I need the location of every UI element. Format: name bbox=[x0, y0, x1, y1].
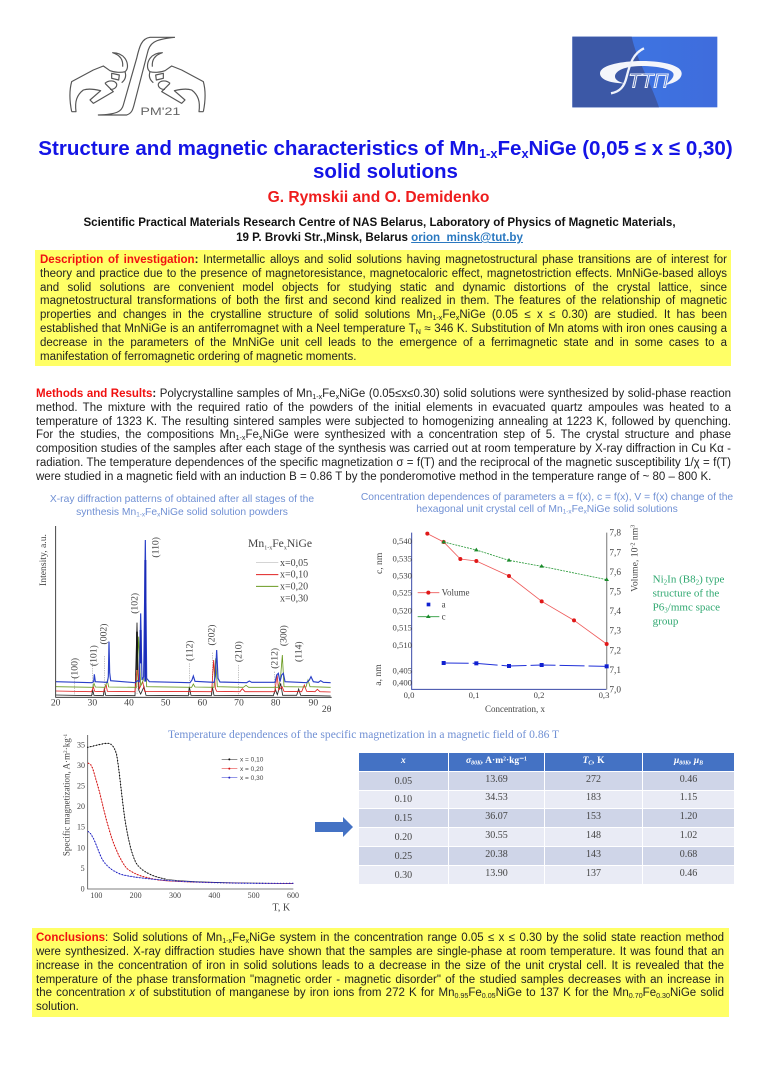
note: crystal structure: 2 bbox=[696, 579, 700, 587]
series: x=0.30 bbox=[56, 540, 331, 683]
chart: lattice parameters vs concentration: 0,405 bbox=[393, 666, 412, 676]
series: x=0.10 bbox=[88, 743, 293, 883]
table: magnetic characteristics: 143 bbox=[586, 849, 601, 860]
table: magnetic characteristics: 13.90 bbox=[485, 868, 508, 879]
chart: X-ray diffraction patterns: (212) bbox=[270, 648, 281, 669]
table: magnetic characteristics: 0.20 bbox=[395, 832, 412, 843]
chart: X-ray diffraction patterns: (002) bbox=[99, 624, 110, 644]
table: magnetic characteristics: 0.05 bbox=[395, 776, 412, 787]
chart: lattice parameters vs concentration: 0,535 bbox=[393, 553, 412, 563]
chart: specific magnetization vs temperature: 300 bbox=[169, 891, 181, 900]
text block: methods and results: For the studies, the compositions Mn1-xFexNiGe were synthesized with a concentration step of 5. The crystal structure and phase bbox=[36, 429, 731, 442]
panel: description of investigation: theory and practice due to the presence of magnetoresistance, magnetocaloric effect, magnetostriction effects. MnNiGe-based alloys bbox=[40, 268, 727, 280]
chart: lattice parameters vs concentration: Volume, 10 bbox=[629, 548, 640, 592]
text block: methods and results: Methods and Results: Polycrystalline samples of Mn1-xFexNiGe (0.05≤x≤0.30) solid solutions were synthesized by solid-phase reaction bbox=[36, 388, 731, 401]
legend: Volume bbox=[442, 588, 470, 598]
table: magnetic characteristics: 13.69 bbox=[485, 774, 508, 785]
table: magnetic characteristics: 36.07 bbox=[485, 811, 508, 822]
chart: X-ray diffraction patterns: (114) bbox=[294, 641, 305, 662]
caption: concentration dependences bbox=[361, 492, 733, 516]
chart: lattice parameters vs concentration: 0,515 bbox=[393, 623, 412, 633]
legend bbox=[222, 757, 264, 782]
logo: PM'21 conference emblem bbox=[69, 36, 206, 118]
chart: specific magnetization vs temperature: 200 bbox=[130, 891, 142, 900]
arrow: chart to table bbox=[315, 817, 353, 837]
chart: lattice parameters vs concentration: 7,7 bbox=[609, 548, 621, 558]
series: x=0.20 bbox=[88, 763, 293, 884]
affiliation bbox=[83, 216, 676, 244]
chart: X-ray diffraction patterns: 70 bbox=[234, 698, 244, 709]
panel: description of investigation: established that MnNiGe is an antiferromagnet with a Neel temperature TN ≈ 346 K. Substitution of Mn atoms with iron ones causing a bbox=[40, 323, 727, 336]
chart: X-ray diffraction patterns: 30 bbox=[88, 698, 97, 709]
legend: x=0,05 bbox=[280, 558, 308, 569]
panel: conclusions: temperature of the phase transformation "magnetic order - magnetic disorder" of the studied samples decreases with an increase in bbox=[36, 974, 724, 986]
table: magnetic characteristics: 20.38 bbox=[485, 849, 508, 860]
chart: X-ray diffraction patterns: (112) bbox=[185, 640, 196, 661]
logo: PM'21 conference emblem: PM'21 bbox=[140, 106, 180, 118]
chart: specific magnetization vs temperature: 400 bbox=[208, 891, 220, 900]
note: crystal structure: In (B8 bbox=[667, 574, 696, 586]
chart: X-ray diffraction patterns: (210) bbox=[234, 641, 245, 662]
legend: x = 0,30 bbox=[240, 775, 264, 782]
caption: X-ray diffraction: X-ray diffraction patterns of obtained after all stages of the bbox=[50, 494, 314, 505]
legend: Fe bbox=[272, 537, 284, 550]
logo: TTP institute emblem bbox=[572, 36, 718, 108]
chart: lattice parameters vs concentration: 7,8 bbox=[609, 529, 621, 539]
chart: specific magnetization vs temperature: 20 bbox=[77, 802, 85, 811]
table: magnetic characteristics: 0.68 bbox=[680, 849, 697, 860]
note: crystal structure: group bbox=[653, 616, 679, 628]
chart: lattice parameters vs concentration: c, nm bbox=[374, 552, 385, 574]
table: magnetic characteristics: TC, K bbox=[583, 756, 604, 766]
chart: lattice parameters vs concentration: nm bbox=[629, 527, 640, 543]
table: magnetic characteristics: 1.15 bbox=[680, 792, 697, 803]
chart: specific magnetization vs temperature: 5 bbox=[81, 864, 85, 873]
note: crystal structure: 3 bbox=[664, 607, 668, 615]
table: magnetic characteristics: 1.02 bbox=[680, 830, 697, 841]
authors: G. Rymskii and O. Demidenko bbox=[268, 189, 489, 206]
chart: specific magnetization vs temperature: Specific magnetization, A·m bbox=[61, 753, 71, 856]
series: x=0.20 bbox=[56, 620, 331, 687]
chart: X-ray diffraction patterns: (202) bbox=[206, 625, 217, 645]
chart: X-ray diffraction patterns: 50 bbox=[161, 698, 171, 709]
note: crystal structure: /mmc space bbox=[668, 602, 720, 614]
table: magnetic characteristics: 137 bbox=[586, 868, 601, 879]
chart: specific magnetization vs temperature: 0 bbox=[81, 885, 85, 894]
legend: 1-x bbox=[264, 545, 272, 551]
legend: x = 0,20 bbox=[240, 766, 264, 773]
chart: lattice parameters vs concentration: a, nm bbox=[373, 664, 384, 686]
title: Structure and magnetic characteristics of Mn1-xFexNiGe (0,05 ≤ x ≤ 0,30) bbox=[38, 137, 733, 161]
series: x=0.05 bbox=[56, 623, 331, 696]
table: magnetic characteristics: 34.53 bbox=[485, 792, 508, 803]
chart: specific magnetization vs temperature: ·kg bbox=[61, 738, 71, 750]
text block: methods and results: radiation. The temperature dependences of the specific magnetization σ = f(T) and the reciprocal of the magnetic susceptibility 1/χ = f(T) bbox=[36, 457, 731, 469]
text block: methods and results bbox=[36, 388, 731, 483]
chart: X-ray diffraction patterns: Intensity, a.u. bbox=[38, 534, 49, 586]
legend: x bbox=[284, 545, 287, 551]
chart: lattice parameters vs concentration: 0,540 bbox=[393, 536, 412, 546]
text block: methods and results: temperature of 1323 K. The resulting sintered samples were subjected to homogenizing annealing at 1223 K, followed by quenching. bbox=[36, 416, 731, 428]
chart: X-ray diffraction patterns: (102) bbox=[129, 593, 140, 614]
chart: specific magnetization vs temperature: 500 bbox=[248, 891, 260, 900]
table: magnetic characteristics: 0.25 bbox=[395, 851, 412, 862]
table: magnetic characteristics: 272 bbox=[586, 774, 601, 785]
logo: TTP institute emblem: ТТП bbox=[628, 71, 669, 92]
chart: specific magnetization vs temperature: 35 bbox=[77, 740, 85, 749]
chart: lattice parameters vs concentration: 7,0 bbox=[609, 685, 621, 695]
panel: conclusions: increase in the concentration of iron in solid solutions leads to a decrease in the size of the unit crystal cell. It is revealed that the bbox=[36, 960, 724, 972]
legend: a bbox=[442, 600, 446, 610]
panel: description of investigation: properties and changes in the crystalline structure of solid solutions Mn1-xFexNiGe (0.05 ≤ x ≤ 0.30) are studied. It has been bbox=[40, 309, 727, 322]
table: magnetic characteristics bbox=[359, 753, 734, 884]
series: c bbox=[441, 540, 609, 581]
panel: conclusions: the concentration x of substitution of manganese by iron ions from 272 K for Mn0.95Fe0.05NiGe to 137 K for the Mn0.70Fe0.30NiGe solid bbox=[36, 987, 724, 1000]
title bbox=[38, 137, 733, 183]
table: magnetic characteristics: 0.15 bbox=[395, 813, 412, 824]
legend bbox=[418, 588, 470, 622]
chart: X-ray diffraction patterns: (100) bbox=[69, 658, 80, 679]
panel: description of investigation: Description of investigation: Intermetallic alloys and solid solutions having magnetostructural phase transitions are of interest for bbox=[40, 254, 727, 266]
chart: lattice parameters vs concentration: 0,510 bbox=[393, 640, 412, 650]
chart: lattice parameters vs concentration: 0,2 bbox=[534, 690, 544, 700]
chart: specific magnetization vs temperature: T, K bbox=[273, 903, 291, 914]
chart: lattice parameters vs concentration: 7,6 bbox=[609, 568, 621, 578]
note: crystal structure bbox=[653, 574, 725, 628]
chart: lattice parameters vs concentration: 0,1 bbox=[469, 690, 479, 700]
panel: description of investigation: and solid solutions are convenient model objects for studying static and dynamic distortions of the crystal lattice, since bbox=[40, 282, 727, 294]
caption: concentration dependences: Concentration dependences of parameters a = f(x), c = f(x), V = f(x) change of the bbox=[361, 492, 733, 503]
panel: description of investigation: magnetostructural transformations of both the first and second kind realized in them. The features of the relationship of magnetic bbox=[40, 295, 727, 307]
chart: specific magnetization vs temperature: 2 bbox=[63, 750, 69, 753]
table: magnetic characteristics: σ80K, A·m²·kg⁻¹ bbox=[466, 756, 527, 766]
legend: c bbox=[442, 612, 446, 622]
chart: lattice parameters vs concentration: 0,525 bbox=[393, 588, 412, 598]
chart: lattice parameters vs concentration: 0,400 bbox=[393, 678, 412, 688]
legend: x = 0,10 bbox=[240, 757, 264, 764]
legend: Mn bbox=[248, 537, 264, 550]
chart: lattice parameters vs concentration: 7,4 bbox=[609, 607, 621, 617]
table: magnetic characteristics: 0.30 bbox=[395, 870, 412, 881]
panel: conclusions: solution. bbox=[36, 1001, 79, 1013]
caption: temperature dependences: Temperature dependences of the specific magnetization in a magnetic field of 0.86 T bbox=[168, 729, 559, 741]
table: magnetic characteristics: 148 bbox=[586, 830, 601, 841]
chart: specific magnetization vs temperature: -1 bbox=[63, 734, 69, 738]
caption: concentration dependences: hexagonal unit crystal cell of Mn1-xFexNiGe solid solutions bbox=[416, 504, 678, 516]
affiliation: Scientific Practical Materials Research Centre of NAS Belarus, Laboratory of Physics of Magnetic Materials, bbox=[83, 216, 676, 229]
chart: X-ray diffraction patterns: 60 bbox=[198, 698, 207, 709]
legend: x=0,30 bbox=[280, 594, 308, 605]
chart: lattice parameters vs concentration: 3 bbox=[631, 525, 637, 528]
chart: lattice parameters vs concentration: Concentration, x bbox=[485, 704, 545, 714]
series: x=0.10 bbox=[56, 660, 331, 692]
panel: conclusions: were synthesized. X-ray diffraction studies have shown that the samples are single-phase at room temperature. It was found that an bbox=[36, 946, 724, 958]
table: magnetic characteristics: 153 bbox=[586, 811, 601, 822]
note: crystal structure: 2 bbox=[664, 579, 668, 587]
chart: specific magnetization vs temperature bbox=[61, 734, 299, 914]
table: magnetic characteristics: μ80K, μB bbox=[674, 756, 703, 766]
chart: lattice parameters vs concentration: 0,520 bbox=[393, 605, 412, 615]
table: magnetic characteristics: 0.10 bbox=[395, 794, 412, 805]
note: crystal structure: ) type bbox=[699, 574, 725, 586]
note: crystal structure: P6 bbox=[653, 602, 664, 614]
affiliation: 19 P. Brovki Str.,Minsk, Belarus orion_minsk@tut.by bbox=[236, 231, 523, 244]
chart: lattice parameters vs concentration: 0,0 bbox=[404, 690, 414, 700]
chart: X-ray diffraction patterns: (110) bbox=[151, 537, 162, 558]
series: volume bbox=[425, 532, 609, 646]
text block: methods and results: method. The mixture with the required ratio of the powders of the initial elements in evacuated quartz ampoules was heated to a bbox=[36, 402, 731, 414]
chart: X-ray diffraction patterns: 90 bbox=[309, 698, 318, 709]
chart: X-ray diffraction patterns: 20 bbox=[51, 698, 61, 709]
panel: conclusions bbox=[32, 928, 729, 1017]
legend: x=0,20 bbox=[280, 581, 308, 592]
series: a bbox=[442, 661, 609, 668]
chart: X-ray diffraction patterns: 80 bbox=[271, 698, 281, 709]
chart: X-ray diffraction patterns bbox=[38, 526, 332, 715]
chart: X-ray diffraction patterns: 40 bbox=[124, 698, 134, 709]
chart: lattice parameters vs concentration bbox=[373, 525, 725, 714]
panel: description of investigation bbox=[35, 250, 731, 366]
legend: x=0,10 bbox=[280, 570, 308, 581]
table: magnetic characteristics: 0.46 bbox=[680, 774, 697, 785]
chart: specific magnetization vs temperature: 10 bbox=[77, 843, 85, 852]
table: magnetic characteristics: 1.20 bbox=[680, 811, 697, 822]
note: crystal structure: structure of the bbox=[653, 588, 719, 600]
chart: specific magnetization vs temperature: 25 bbox=[77, 782, 85, 791]
chart: X-ray diffraction patterns: (300) bbox=[278, 625, 289, 646]
table: magnetic characteristics: 183 bbox=[586, 792, 601, 803]
caption: X-ray diffraction bbox=[50, 494, 314, 518]
panel: conclusions: Conclusions: Solid solutions of Mn1-xFexNiGe system in the concentration range 0.05 ≤ x ≤ 0.30 by the solid state reaction method bbox=[36, 932, 724, 945]
table: magnetic characteristics: 0.46 bbox=[680, 868, 697, 879]
series: x=0.30 bbox=[88, 832, 293, 883]
chart: lattice parameters vs concentration: 7,3 bbox=[609, 627, 621, 637]
chart: lattice parameters vs concentration: 0,530 bbox=[393, 571, 412, 581]
chart: lattice parameters vs concentration: 7,1 bbox=[609, 666, 621, 676]
note: crystal structure: Ni bbox=[653, 574, 664, 586]
panel: description of investigation: decrease in the parameters of the MnNiGe unit cell leads to the emergence of a ferrimagnetic state and in some cases to a bbox=[40, 337, 727, 349]
chart: specific magnetization vs temperature: 15 bbox=[77, 823, 85, 832]
chart: lattice parameters vs concentration: 7,5 bbox=[609, 588, 621, 598]
chart: specific magnetization vs temperature: 30 bbox=[77, 761, 85, 770]
table: magnetic characteristics: x bbox=[401, 756, 406, 766]
legend: NiGe bbox=[287, 537, 312, 550]
table: magnetic characteristics: 30.55 bbox=[485, 830, 508, 841]
chart: specific magnetization vs temperature: 600 bbox=[287, 891, 299, 900]
panel: description of investigation: manifestation of ferromagnetic ordering of magnetic moments. bbox=[40, 351, 356, 363]
chart: lattice parameters vs concentration: 0,3 bbox=[599, 690, 609, 700]
chart: X-ray diffraction patterns: (101) bbox=[89, 645, 100, 666]
chart: lattice parameters vs concentration: 7,2 bbox=[609, 646, 621, 656]
chart: lattice parameters vs concentration: -2 bbox=[631, 543, 637, 548]
legend bbox=[248, 537, 312, 605]
chart: X-ray diffraction patterns: 2θ bbox=[322, 704, 332, 715]
chart: specific magnetization vs temperature: 100 bbox=[90, 891, 102, 900]
text block: methods and results: composition studies of the samples after each stage of the synthesis was carried out at room temperature by X-ray diffraction in Cu Kα - bbox=[36, 443, 731, 455]
title: solid solutions bbox=[313, 160, 458, 183]
text block: methods and results: were studied in a magnetic field with an induction B = 0.86 T by the ponderomotive method in the temperature range of ~ 80 – 800 K. bbox=[36, 471, 711, 483]
caption: X-ray diffraction: synthesis Mn1-xFexNiGe solid solution powders bbox=[76, 506, 288, 518]
